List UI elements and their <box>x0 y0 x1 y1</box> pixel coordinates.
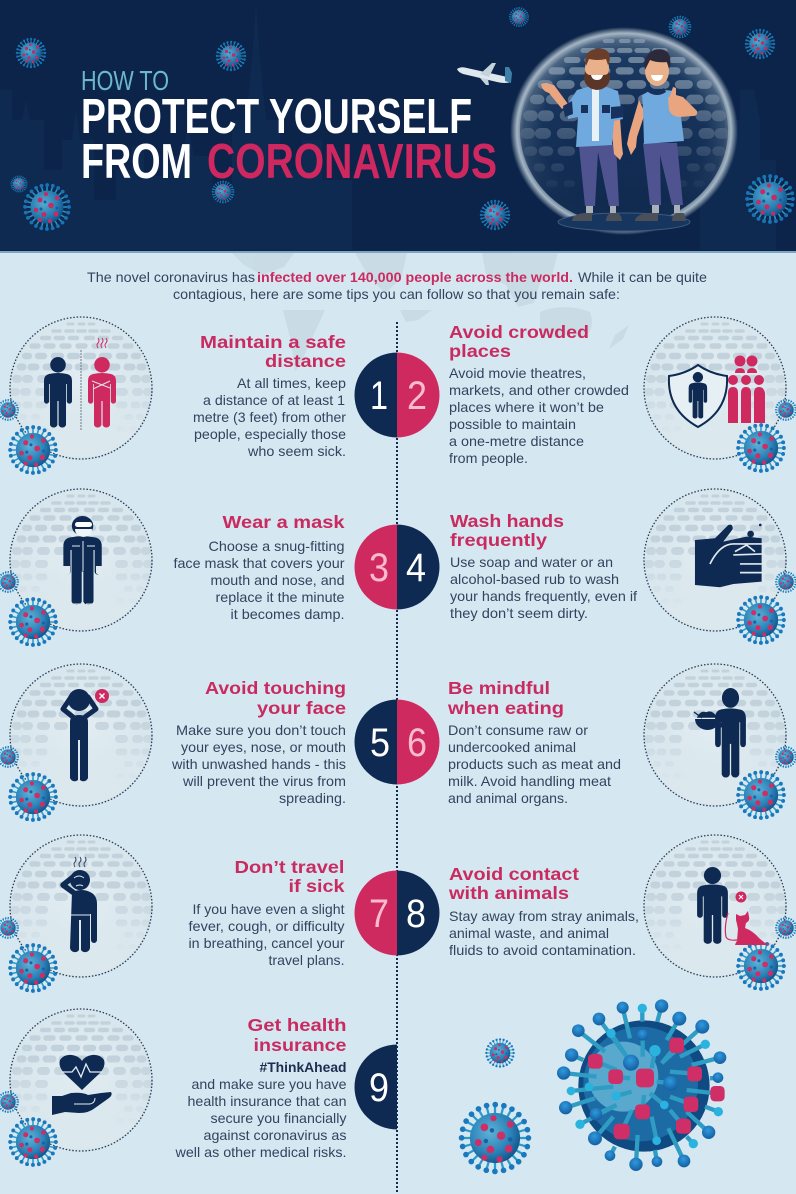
globe with feverish person icon <box>0 835 152 991</box>
body text: possible to maintain <box>449 416 576 432</box>
heading: Maintain a safe <box>200 332 346 352</box>
body text: metre (3 feet) from other <box>193 409 346 425</box>
number 1 <box>355 352 397 438</box>
body text: mouth and nose, and <box>210 572 344 588</box>
body text <box>450 554 637 621</box>
number 2 <box>397 352 440 438</box>
intro text: infected over 140,000 people across the world. <box>257 269 573 285</box>
heading <box>234 857 345 896</box>
heading <box>200 332 346 371</box>
body text: places where it won’t be <box>449 399 604 415</box>
heading: Get health <box>248 1015 346 1035</box>
globe with person and dog icon <box>644 835 796 989</box>
heading: frequently <box>450 530 547 550</box>
body text: Make sure you don’t touch <box>176 722 346 738</box>
medium virus illustration <box>462 1105 528 1171</box>
number 9 <box>355 1044 397 1130</box>
title: PROTECT YOURSELF <box>81 90 472 144</box>
title: FROM <box>81 135 192 189</box>
globe with protective suit icon <box>0 489 152 645</box>
body text: will prevent the virus from <box>182 773 346 789</box>
body text: Don’t consume raw or <box>448 722 588 738</box>
heading: Avoid touching <box>205 678 346 698</box>
globe with sick and healthy people icon <box>0 317 152 473</box>
body text <box>449 908 639 958</box>
number 3: 3 <box>369 546 389 590</box>
number 8 <box>397 870 440 956</box>
intro text <box>87 269 707 302</box>
center dotted timeline <box>396 322 398 1194</box>
body text: At all times, keep <box>237 375 346 391</box>
heading: Wear a mask <box>222 512 345 532</box>
heading <box>205 678 346 718</box>
body text: undercooked animal <box>448 739 576 755</box>
body text <box>174 538 345 622</box>
body text: and make sure you have <box>192 1076 347 1092</box>
icon: airplane <box>457 63 512 85</box>
panel: tip 1 <box>0 317 397 473</box>
heading: if sick <box>288 876 345 896</box>
small virus illustration <box>486 1039 514 1067</box>
number 8: 8 <box>406 892 426 936</box>
floating virus particles <box>11 8 793 229</box>
body text: they don’t seem dirty. <box>450 605 588 621</box>
body text: people, especially those <box>194 426 346 442</box>
body text <box>174 1059 347 1160</box>
heading <box>447 678 564 718</box>
panel: tip 2 <box>397 317 796 471</box>
intro text: contagious, here are some tips you can follow so that you remain safe: <box>173 286 620 302</box>
panel: tip 7 <box>0 835 397 991</box>
man with beard <box>541 49 624 221</box>
number 5: 5 <box>370 721 390 765</box>
heading: when eating <box>447 698 564 718</box>
body text: health insurance that can <box>188 1093 346 1109</box>
heading: Don’t travel <box>234 857 344 877</box>
panel: tip 6 <box>397 664 796 818</box>
body text: Stay away from stray animals, <box>449 908 639 924</box>
title: CORONAVIRUS <box>207 135 497 189</box>
heading <box>448 864 579 903</box>
body text: a one-metre distance <box>449 433 584 449</box>
body text <box>193 375 346 459</box>
header banner <box>0 0 796 253</box>
heading: Avoid crowded <box>449 322 589 342</box>
number 7: 7 <box>369 892 389 936</box>
heading <box>450 511 564 550</box>
number 9: 9 <box>369 1066 389 1110</box>
panel: tip 4 <box>397 489 796 643</box>
body text: from people. <box>449 450 528 466</box>
body text: well as other medical risks. <box>174 1144 346 1160</box>
protective dome with two men <box>510 27 738 235</box>
panel: tip 9 <box>0 1009 397 1165</box>
body text: Use soap and water or an <box>450 554 613 570</box>
panel: tip 3 <box>0 489 397 645</box>
body text: your eyes, nose, or mouth <box>181 739 346 755</box>
globe with shield and crowd icon <box>644 317 796 471</box>
number 6 <box>397 700 440 784</box>
body text: animal waste, and animal <box>449 925 609 941</box>
body text: and animal organs. <box>448 790 568 806</box>
man with thumbs up <box>627 49 697 221</box>
body text: it becomes damp. <box>230 606 344 622</box>
body text: fever, cough, or difficulty <box>188 918 344 934</box>
body text: secure you financially <box>210 1110 346 1126</box>
city skyline silhouette <box>0 5 776 250</box>
heading: places <box>449 341 511 361</box>
number 4: 4 <box>406 546 426 590</box>
number 4 <box>397 524 440 610</box>
body text: markets, and other crowded <box>449 382 629 398</box>
heading: with animals <box>448 883 569 903</box>
world map watermark <box>232 253 629 372</box>
body text: spreading. <box>279 790 346 806</box>
body text: replace it the minute <box>216 589 345 605</box>
heading: Be mindful <box>448 678 550 698</box>
title <box>81 65 497 189</box>
globe with washing hands icon <box>644 489 796 643</box>
body text: your hands frequently, even if <box>450 588 637 604</box>
heading: distance <box>265 351 346 371</box>
heading: Avoid contact <box>449 864 579 884</box>
body text: who seem sick. <box>247 443 346 459</box>
number 3 <box>355 524 397 610</box>
body text: milk. Avoid handling meat <box>448 773 611 789</box>
body text: products such as meat and <box>448 756 621 772</box>
number 6: 6 <box>407 721 427 765</box>
heading: insurance <box>254 1035 347 1055</box>
title: HOW TO <box>81 65 169 96</box>
body text: in breathing, cancel your <box>188 935 345 951</box>
body text: a distance of at least 1 <box>203 392 345 408</box>
body text: with unwashed hands - this <box>171 756 346 772</box>
body text: face mask that covers your <box>174 555 345 571</box>
body text: against coronavirus as <box>204 1127 346 1143</box>
globe with hands on head icon <box>0 664 152 820</box>
body text: Avoid movie theatres, <box>449 365 586 381</box>
heading: your face <box>257 698 346 718</box>
heading <box>449 322 589 361</box>
panel: tip 5 <box>0 664 397 820</box>
body text <box>171 722 346 806</box>
body text <box>188 901 345 968</box>
globe with person eating icon <box>644 664 796 818</box>
body text: #ThinkAhead <box>260 1059 346 1075</box>
panel: tip 8 <box>397 835 796 989</box>
body text: fluids to avoid contamination. <box>449 942 636 958</box>
number 1: 1 <box>370 374 388 418</box>
heading <box>248 1015 347 1055</box>
large virus illustration <box>557 999 726 1171</box>
heading: Wash hands <box>450 511 564 531</box>
body text: Choose a snug-fitting <box>208 538 344 554</box>
body text: travel plans. <box>268 952 344 968</box>
number 5 <box>355 700 397 784</box>
body text <box>448 722 621 806</box>
intro text: The novel coronavirus has <box>87 269 255 285</box>
body text <box>449 365 629 466</box>
body text: alcohol-based rub to wash <box>450 571 619 587</box>
number 7 <box>355 870 397 956</box>
number 2: 2 <box>407 374 427 418</box>
intro text: While it can be quite <box>578 269 707 285</box>
globe with heart and hand icon <box>0 1009 152 1165</box>
body text: If you have even a slight <box>192 901 345 917</box>
